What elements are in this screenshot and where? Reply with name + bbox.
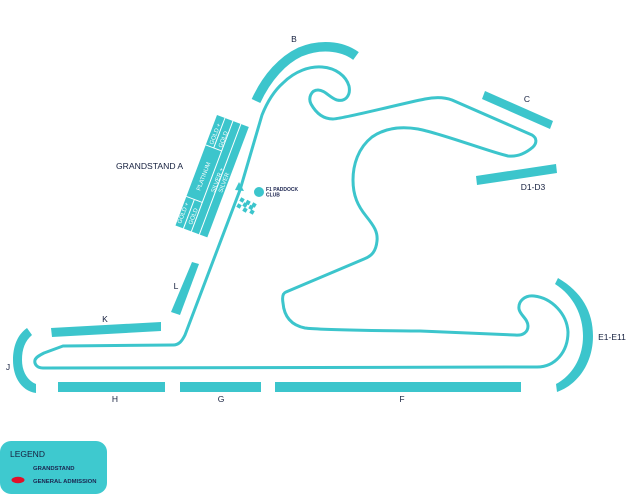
grandstand G (180, 382, 261, 392)
F1 paddock club label: CLUB (266, 192, 280, 198)
seating label: gold plus top: GOLD + (209, 122, 223, 146)
grandstand B (256, 47, 356, 101)
legend item: general admission: GENERAL ADMISSION (33, 479, 96, 485)
grandstand K (51, 322, 161, 337)
seating label: gold bottom: GOLD (188, 207, 200, 226)
grandstand A seating block (175, 115, 249, 237)
icon: F1 paddock club marker (254, 187, 264, 197)
grandstand D1-D3 (476, 164, 557, 185)
seating label: platinum: PLATINUM (196, 162, 212, 192)
label: G: G (218, 394, 224, 404)
label: L: L (174, 281, 179, 291)
icon: chequered flag (236, 197, 257, 215)
label: E1-E11: E1-E11 (598, 332, 626, 342)
label: K: K (102, 314, 108, 324)
legend heading: LEGEND (10, 449, 45, 459)
grandstand L (171, 262, 199, 315)
grandstand E1-E11 (555, 278, 593, 392)
seating label: gold plus bottom: GOLD + (177, 201, 191, 225)
seating label: gold top: GOLD (218, 130, 230, 149)
grandstand C (482, 91, 553, 129)
icon: general admission swatch (12, 477, 24, 483)
label: B: B (291, 34, 297, 44)
seating label: silver plus: SILVER + (211, 167, 226, 194)
label: F: F (399, 394, 405, 404)
label: grandstand A: GRANDSTAND A (116, 161, 183, 171)
label: D1-D3: D1-D3 (521, 182, 546, 192)
race track circuit (35, 67, 568, 368)
label: H: H (112, 394, 118, 404)
label: J: J (6, 362, 10, 372)
legend item: grandstand: GRANDSTAND (33, 466, 74, 472)
legend panel (0, 441, 107, 494)
label: C: C (524, 94, 530, 104)
F1 paddock club label: F1 PADDOCK (266, 187, 299, 193)
grandstand H (58, 382, 165, 392)
grandstand F (275, 382, 521, 392)
seating label: silver: SILVER (218, 171, 231, 194)
grandstand J (13, 328, 36, 393)
start direction arrow (235, 182, 244, 191)
